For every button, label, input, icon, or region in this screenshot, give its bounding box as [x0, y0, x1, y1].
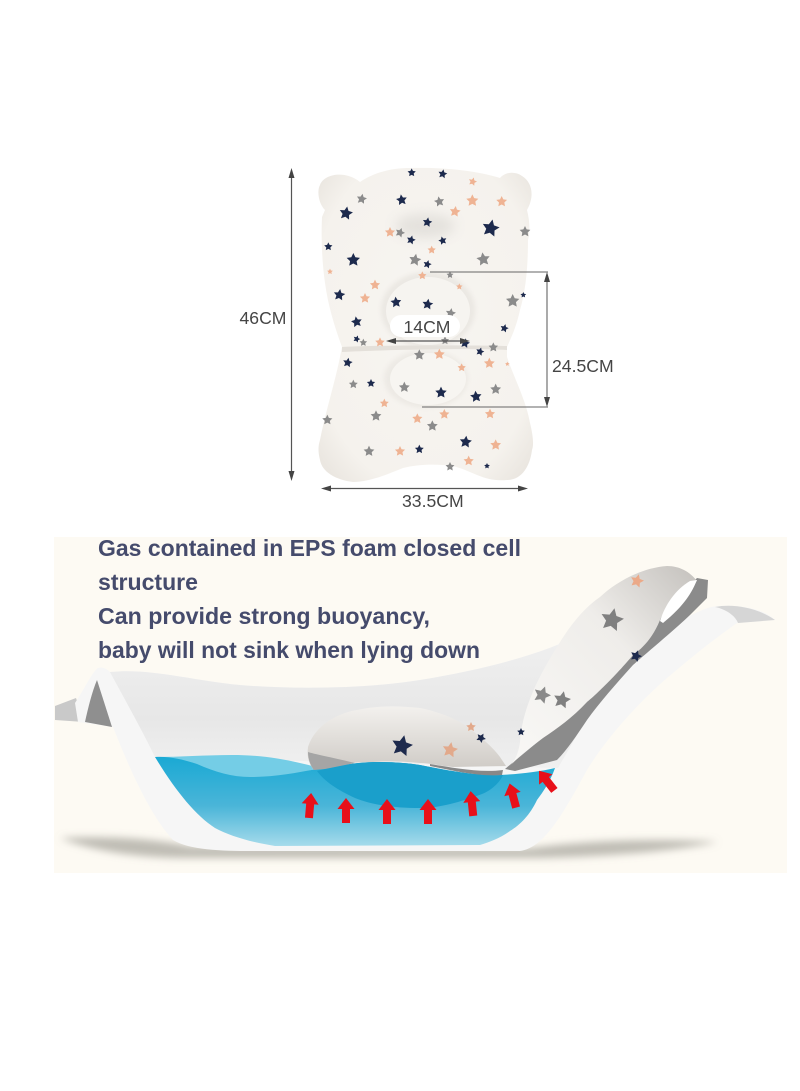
dimension: opening length 24.5CM — [422, 272, 614, 407]
arrow 5 — [462, 790, 482, 817]
cushion front section — [308, 706, 506, 769]
dimension: opening width 14CM: 14CM — [404, 317, 450, 337]
illustration: star-print bath cushion — [318, 168, 533, 482]
dimension: width 33.5CM — [321, 486, 528, 511]
arrow 4 — [420, 799, 436, 824]
dimension: width 33.5CM: 33.5CM — [402, 491, 464, 511]
heading: buoyancy explanation: Gas contained in EPS foam closed cell — [98, 535, 521, 561]
heading: buoyancy explanation: structure — [98, 569, 198, 595]
tub outer shell — [75, 600, 775, 851]
tub handle shadow — [85, 680, 112, 727]
stars on cushion in tub — [390, 573, 645, 758]
dimension: opening length 24.5CM: 24.5CM — [552, 356, 614, 376]
label background: 14CM — [390, 315, 460, 337]
arrow 7 — [532, 766, 561, 796]
dimension: height 46CM — [240, 168, 294, 481]
heading: buoyancy explanation: baby will not sink when lying down — [98, 637, 480, 663]
illustration: tub ground shadow — [60, 837, 718, 858]
heading: buoyancy explanation — [98, 535, 521, 663]
water — [155, 757, 555, 846]
arrow 6 — [501, 781, 524, 810]
arrow 3 — [378, 799, 396, 824]
cushion back section — [510, 566, 697, 766]
submerged part of cushion — [317, 762, 503, 808]
dimension: height 46CM: 46CM — [240, 308, 286, 328]
tub left handle tab — [55, 698, 84, 722]
water back surface — [155, 755, 320, 785]
illustration: cutaway bath tub with floating cushion — [55, 566, 775, 851]
cushion back section mesh — [505, 578, 708, 771]
cushion front mesh — [308, 752, 355, 770]
tub inner back wall — [110, 645, 620, 768]
panel: buoyancy illustration background — [54, 537, 787, 873]
cushion head slot — [660, 580, 697, 623]
arrow 1 — [300, 792, 320, 819]
arrow 2 — [338, 798, 354, 823]
dimension: opening width 14CM — [386, 317, 470, 344]
icon group: red buoyancy arrows — [300, 766, 561, 824]
panel: cushion dimensions diagram — [240, 168, 614, 511]
heading: buoyancy explanation: Can provide strong buoyancy, — [98, 603, 430, 629]
stars pattern — [322, 168, 530, 470]
